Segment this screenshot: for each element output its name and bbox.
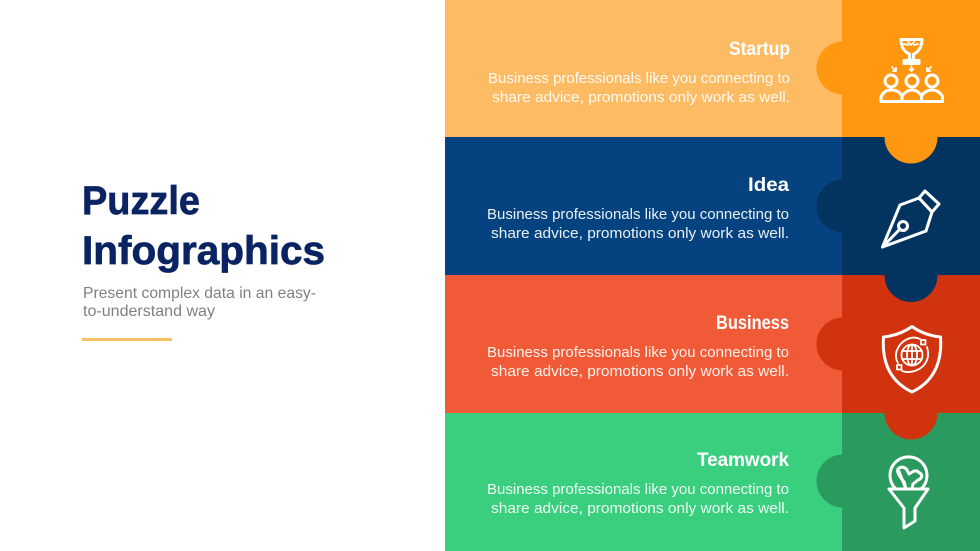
- icon: pen nib: [882, 191, 939, 247]
- subtitle: [83, 285, 316, 320]
- title: [82, 179, 325, 273]
- text: startup description: Business professionals like you connecting to: [488, 70, 790, 87]
- panel: startup: [445, 0, 980, 164]
- text: business description: share advice, promotions only work as well.: [491, 363, 789, 380]
- text: teamwork description: [487, 481, 789, 517]
- text: business description: Business professionals like you connecting to: [487, 344, 789, 361]
- heading: startup: Startup: [729, 39, 790, 60]
- subtitle: Present complex data in an easy-: [83, 285, 316, 302]
- subtitle: to-understand way: [83, 303, 215, 320]
- text: teamwork description: Business professionals like you connecting to: [487, 481, 789, 498]
- text: idea description: [487, 206, 789, 242]
- text: startup description: share advice, promotions only work as well.: [492, 89, 790, 106]
- panel: idea: [445, 137, 980, 302]
- icon: globe funnel: [889, 457, 928, 528]
- heading: teamwork: Teamwork: [697, 450, 789, 471]
- text: startup description: [488, 70, 790, 106]
- icon: shield globe: [883, 326, 941, 392]
- title: Infographics: [82, 229, 325, 273]
- title: Puzzle: [82, 179, 200, 223]
- accent line: [82, 338, 172, 341]
- heading: idea: Idea: [748, 175, 789, 196]
- text: business description: [487, 344, 789, 380]
- panel: business: [445, 275, 980, 440]
- text: idea description: share advice, promotions only work as well.: [491, 225, 789, 242]
- text: idea description: Business professionals like you connecting to: [487, 206, 789, 223]
- text: teamwork description: share advice, promotions only work as well.: [491, 500, 789, 517]
- heading: business: Business: [716, 313, 789, 334]
- icon: trophy and team: [881, 40, 942, 102]
- panel: teamwork: [445, 413, 980, 551]
